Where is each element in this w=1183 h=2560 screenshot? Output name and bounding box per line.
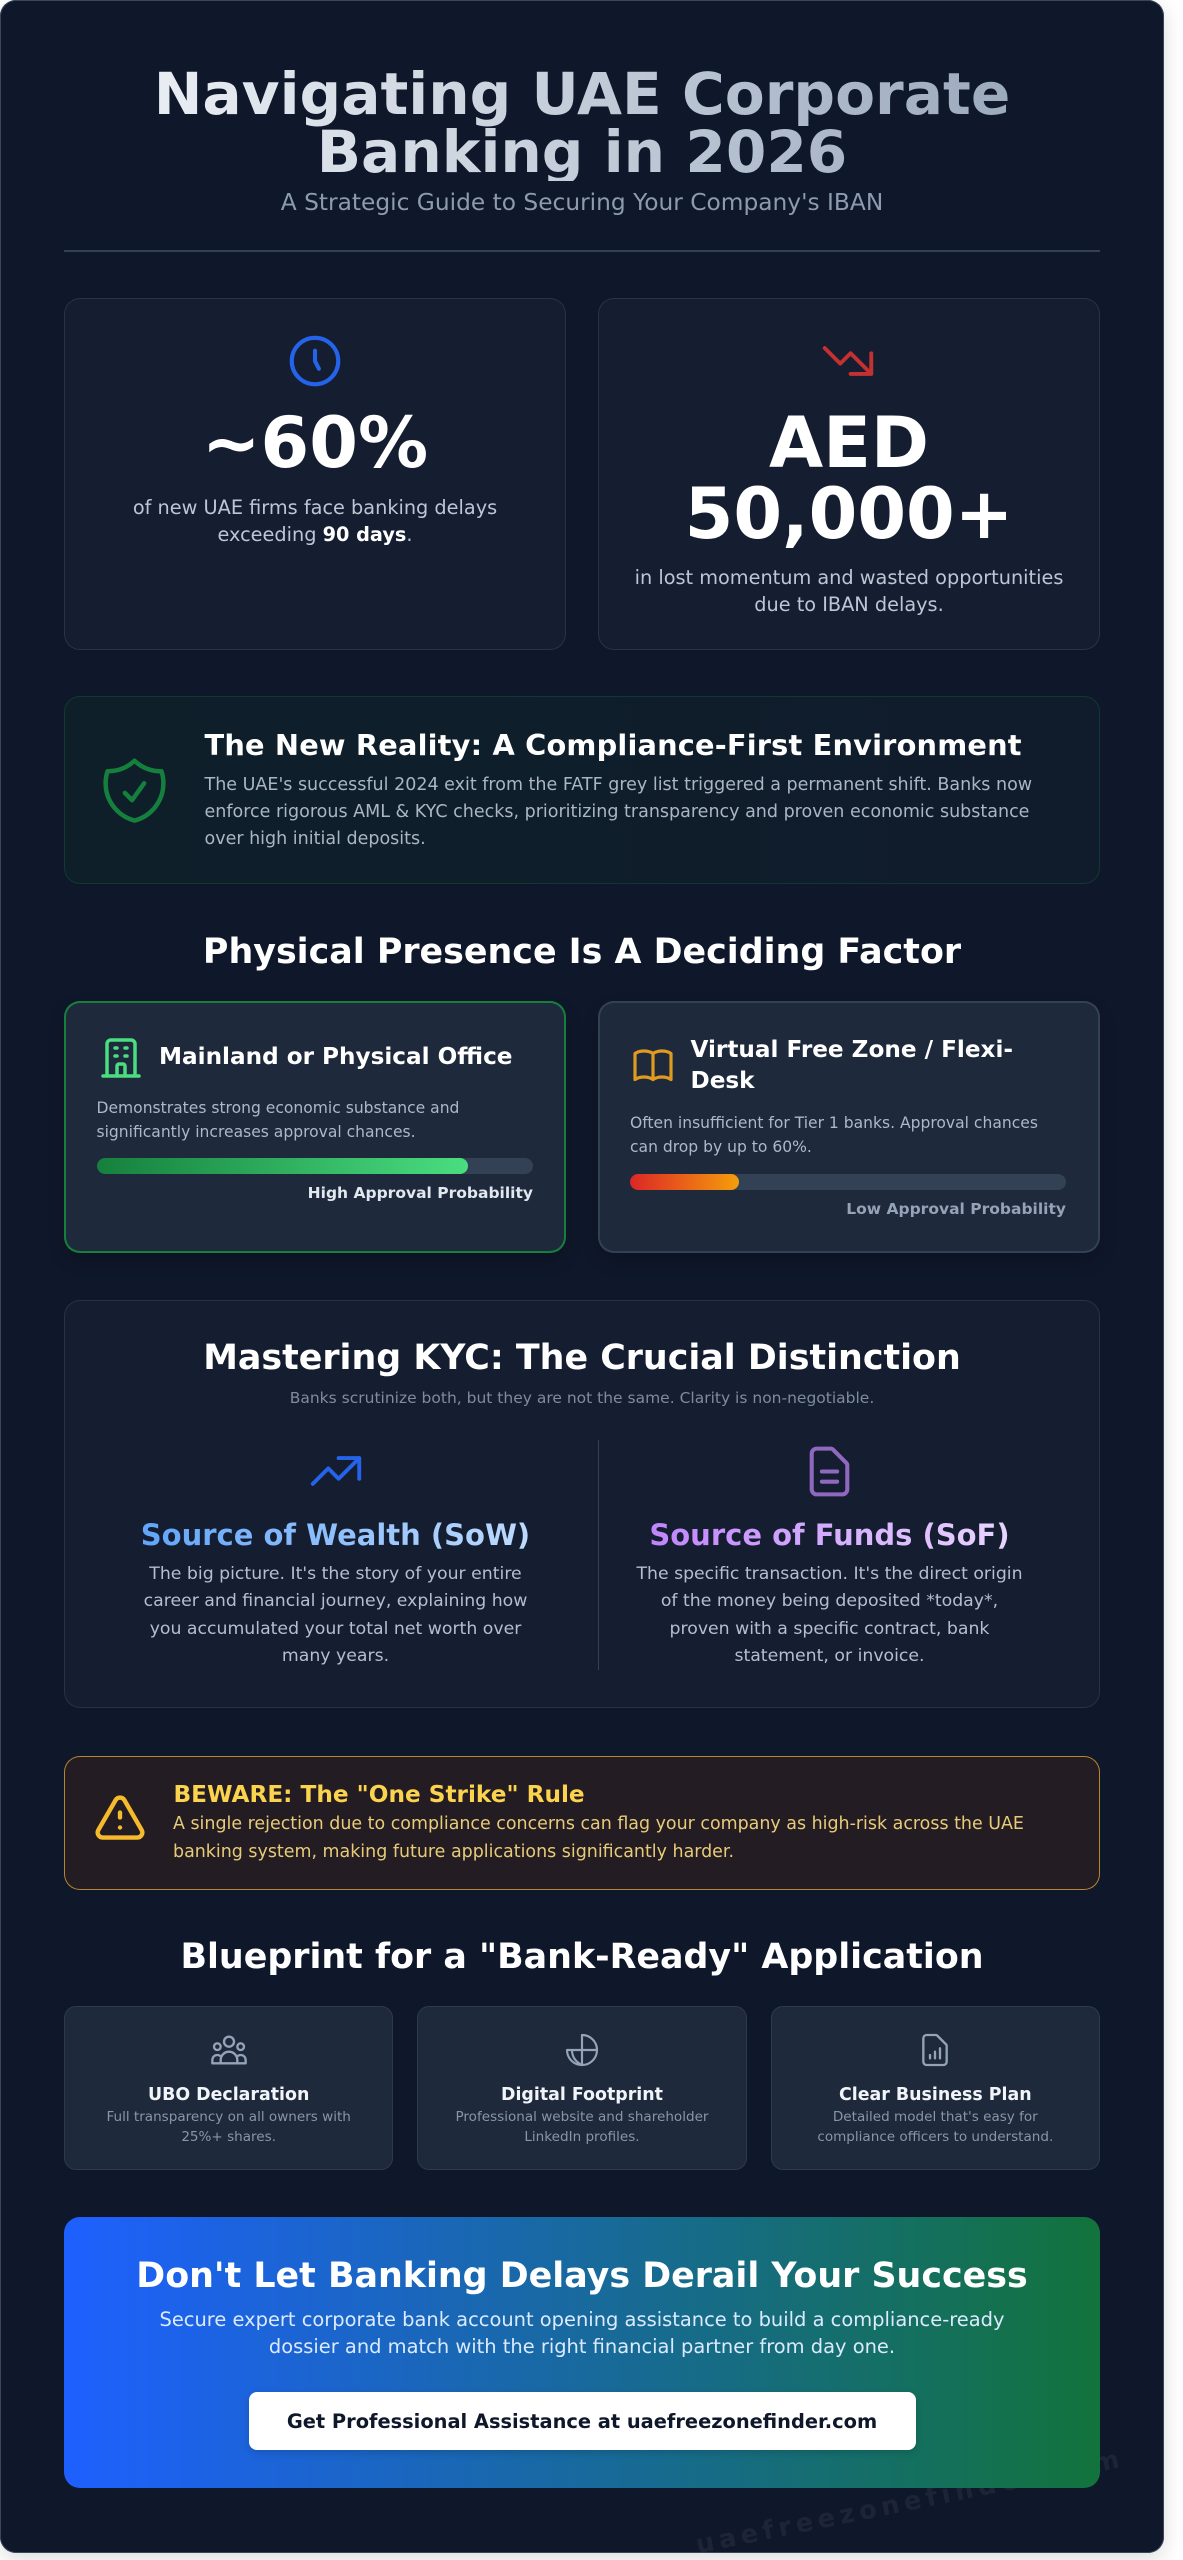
warning heading: BEWARE: The "One Strike" Rule — [174, 1781, 585, 1808]
text: source of wealth: many years. — [282, 1646, 389, 1666]
warning text — [173, 1814, 1024, 1862]
stat number: 50,000+ — [685, 473, 1013, 555]
panel: virtual free zone — [598, 1001, 1100, 1253]
icon: office building — [101, 1038, 141, 1078]
card heading: Digital Footprint — [501, 2085, 663, 2105]
card heading — [690, 1036, 1013, 1094]
heading: source of funds: Source of Funds (SoF) — [649, 1518, 1010, 1552]
text: source of funds: proven with a specific contract, bank — [670, 1619, 989, 1639]
compliance text: enforce rigorous AML & KYC checks, prioritizing transparency and proven economic substance — [204, 802, 1029, 822]
panel: call to action — [64, 2217, 1100, 2488]
text: source of funds — [636, 1564, 1023, 1666]
CTA text: dossier and match with the right financial partner from day one. — [269, 2335, 895, 2358]
stat description — [635, 566, 1063, 616]
text: source of wealth: career and financial journey, explaining how — [144, 1591, 527, 1611]
card text: significantly increases approval chances. — [96, 1122, 416, 1140]
text: source of funds: of the money being deposited *today*, — [661, 1591, 998, 1611]
bar label: High Approval Probability — [308, 1184, 533, 1202]
panel: stat AED 50,000 — [598, 298, 1100, 650]
card text — [455, 2109, 708, 2145]
card text: Detailed model that's easy for — [833, 2109, 1038, 2125]
stat number — [685, 402, 1013, 555]
icon: open book — [633, 1049, 673, 1082]
icon: trending down — [822, 346, 874, 376]
text: source of wealth: you accumulated your total net worth over — [150, 1619, 521, 1639]
icon: segmented circle — [566, 2034, 598, 2066]
text: source of wealth: The big picture. It's the story of your entire — [149, 1564, 522, 1584]
low approval bar — [630, 1174, 1066, 1190]
icon: document — [810, 1446, 850, 1496]
card text: Often insufficient for Tier 1 banks. Approval chances — [630, 1114, 1038, 1132]
card text — [817, 2109, 1053, 2145]
KYC subheading: Banks scrutinize both, but they are not the same. Clarity is non-negotiable. — [290, 1389, 874, 1407]
CTA button: Get Professional Assistance at uaefreezonefinder.com — [287, 2410, 877, 2433]
card text: Full transparency on all owners with — [106, 2109, 351, 2125]
icon: document report — [922, 2034, 948, 2066]
card text — [106, 2109, 351, 2145]
bar label: Low Approval Probability — [846, 1200, 1066, 1218]
card text: can drop by up to 60%. — [630, 1138, 812, 1156]
card heading: UBO Declaration — [148, 2085, 309, 2105]
CTA text — [160, 2308, 1004, 2358]
heading: source of wealth: Source of Wealth (SoW) — [141, 1518, 530, 1552]
text: source of funds: The specific transaction. It's the direct origin — [636, 1564, 1023, 1584]
panel: one strike warning — [64, 1756, 1100, 1890]
panel: KYC distinction — [64, 1300, 1100, 1708]
title — [64, 65, 1100, 181]
card text — [96, 1098, 459, 1140]
icon: shield check — [103, 758, 166, 823]
CTA text: Secure expert corporate bank account opening assistance to build a compliance-ready — [160, 2308, 1004, 2330]
card heading: Desk — [690, 1068, 755, 1094]
card text: compliance officers to understand. — [817, 2129, 1053, 2145]
stat description: due to IBAN delays. — [754, 593, 944, 616]
card heading: Clear Business Plan — [839, 2085, 1032, 2105]
panel: digital footprint — [417, 2006, 747, 2170]
icon: clock — [290, 336, 340, 386]
panel: mainland or physical office — [64, 1001, 566, 1253]
stat description: exceeding 90 days. — [217, 523, 413, 546]
compliance text: The UAE's successful 2024 exit from the FATF grey list triggered a permanent shift. Banks now — [204, 774, 1032, 794]
icon: trending up — [310, 1456, 362, 1486]
card text: LinkedIn profiles. — [524, 2129, 640, 2145]
stat description: of new UAE firms face banking delays — [133, 496, 497, 519]
text: source of funds: statement, or invoice. — [734, 1646, 925, 1666]
CTA heading: Don't Let Banking Delays Derail Your Success — [136, 2256, 1028, 2296]
panel: compliance-first environment — [64, 696, 1100, 884]
card text: Demonstrates strong economic substance and — [96, 1098, 459, 1116]
title: Navigating UAE Corporate — [154, 60, 1010, 128]
stat description — [133, 496, 497, 546]
panel: UBO declaration — [64, 2006, 393, 2170]
card text: Professional website and shareholder — [455, 2109, 708, 2125]
card text — [630, 1114, 1038, 1156]
stat number: ~60% — [202, 402, 428, 484]
CTA button — [248, 2392, 916, 2450]
stat number: AED — [769, 402, 929, 484]
title: Banking in 2026 — [317, 118, 847, 186]
card heading: Mainland or Physical Office — [159, 1044, 512, 1070]
compliance heading: The New Reality: A Compliance-First Environment — [204, 728, 1022, 762]
text: source of wealth — [144, 1564, 527, 1666]
panel: stat 60 percent — [64, 298, 566, 650]
subtitle: A Strategic Guide to Securing Your Company's IBAN — [281, 189, 883, 216]
high approval bar — [97, 1158, 533, 1174]
compliance text: over high initial deposits. — [204, 829, 426, 849]
KYC heading: Mastering KYC: The Crucial Distinction — [203, 1338, 961, 1378]
icon: warning triangle — [95, 1795, 145, 1840]
stat description: in lost momentum and wasted opportunities — [635, 566, 1063, 589]
heading: blueprint: Blueprint for a "Bank-Ready" Application — [180, 1937, 984, 1977]
warning text: A single rejection due to compliance concerns can flag your company as high-risk across the UAE — [173, 1814, 1024, 1834]
warning text: banking system, making future applications significantly harder. — [173, 1842, 734, 1862]
heading: physical presence: Physical Presence Is A Deciding Factor — [203, 932, 961, 972]
card text: 25%+ shares. — [181, 2129, 276, 2145]
icon: user group — [211, 2036, 247, 2064]
compliance text — [204, 774, 1032, 849]
card heading: Virtual Free Zone / Flexi- — [690, 1036, 1013, 1062]
panel: clear business plan — [771, 2006, 1100, 2170]
